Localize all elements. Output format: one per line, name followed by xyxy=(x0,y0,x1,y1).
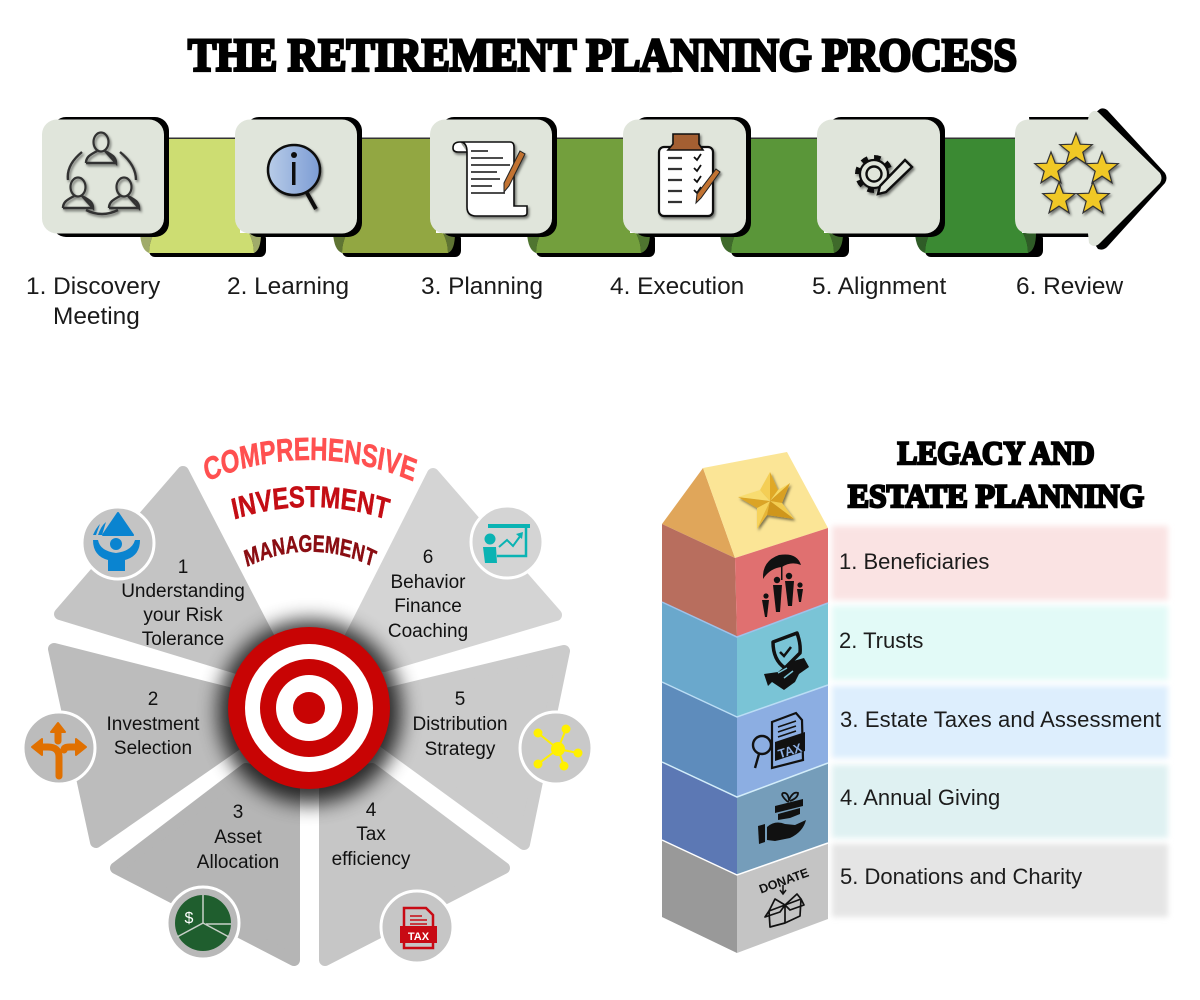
icon: tax document: TAX xyxy=(408,931,430,943)
block 5 xyxy=(662,840,828,953)
segment text 3: Asset xyxy=(214,827,262,848)
roof xyxy=(662,452,828,558)
step labels: 1. Discovery xyxy=(26,273,161,300)
icon: tax search: TAX xyxy=(776,741,804,761)
icon: gift in hand xyxy=(758,793,806,844)
segment 3 xyxy=(116,769,294,960)
icon: clipboard checklist xyxy=(659,134,720,216)
icon: gold star xyxy=(738,472,794,529)
curved heading: COMPREHENSIVE xyxy=(204,438,418,482)
title: THE RETIREMENT PLANNING PROCESS xyxy=(188,30,1017,82)
icon: direction arrows xyxy=(23,712,95,784)
process ribbon: six steps xyxy=(42,108,1166,257)
segment 2 xyxy=(54,649,240,842)
segment 5 xyxy=(384,651,564,844)
step labels: 4. Execution xyxy=(610,273,744,300)
block 2 xyxy=(662,602,828,717)
bullseye target xyxy=(228,627,390,789)
connector ribbon 2 xyxy=(333,138,461,257)
segment 6 xyxy=(349,474,556,666)
segment 4 xyxy=(325,769,504,960)
segment text 2: 2 xyxy=(148,689,158,710)
icon: scroll and pen xyxy=(453,142,527,216)
step box 1 xyxy=(42,117,169,237)
icon: gear and pencil xyxy=(858,158,912,194)
icon: donate box: DONATE xyxy=(757,866,811,896)
segment text 2: Investment xyxy=(107,714,200,735)
step labels: Meeting xyxy=(53,303,140,330)
segment text 2: Selection xyxy=(114,738,192,759)
segment text 3: 3 xyxy=(233,802,243,823)
segment text 5: 5 xyxy=(455,689,465,710)
icon: distribution network xyxy=(520,712,592,784)
bar 5 background xyxy=(832,844,1168,917)
segment text 6: 6 xyxy=(423,547,433,568)
connector ribbon 5 xyxy=(915,138,1043,257)
icon: shield and handshake xyxy=(764,633,809,690)
icon: info magnifier xyxy=(268,145,320,209)
connector ribbon 4 xyxy=(720,138,849,257)
bar 4 background xyxy=(832,765,1168,838)
segment text 4: efficiency xyxy=(332,849,411,870)
bar label 2: 2. Trusts xyxy=(839,628,923,653)
icon: five stars xyxy=(1035,133,1118,213)
label bars xyxy=(832,526,1168,917)
icon: risk umbrella figure xyxy=(82,507,154,579)
segment 1 xyxy=(60,472,270,668)
step box 2 xyxy=(235,117,362,237)
curved heading: MANAGEMENT xyxy=(244,534,378,567)
icon: asset pie xyxy=(167,887,239,959)
step box 4 xyxy=(623,117,751,237)
step labels: 6. Review xyxy=(1016,273,1123,300)
step labels: 3. Planning xyxy=(421,273,543,300)
icon: donate box xyxy=(757,866,811,927)
step labels: 5. Alignment xyxy=(812,273,946,300)
step labels xyxy=(26,273,1123,330)
segment text 6: Coaching xyxy=(388,621,468,642)
segment text 4: 4 xyxy=(366,800,377,821)
block 1 xyxy=(662,524,828,637)
bar label 5: 5. Donations and Charity xyxy=(840,864,1082,889)
bar 3 background xyxy=(832,686,1168,758)
legacy heading xyxy=(848,436,1144,515)
segment text 6: Behavior xyxy=(390,572,466,593)
segment text 1: Understanding xyxy=(121,581,245,602)
target shadow xyxy=(218,620,402,804)
wheel: comprehensive investment management xyxy=(24,438,590,966)
icon: three people in a circle xyxy=(63,132,139,214)
bar label 4: 4. Annual Giving xyxy=(840,785,1000,810)
bar label 1: 1. Beneficiaries xyxy=(839,549,989,574)
segment text 4: Tax xyxy=(356,824,386,845)
stacked house xyxy=(662,452,828,953)
bar label 3: 3. Estate Taxes and Assessment xyxy=(840,707,1161,732)
icon: asset pie: $ xyxy=(185,910,194,927)
segment text 1: 1 xyxy=(178,557,188,578)
step box 6: arrow head xyxy=(1015,108,1166,250)
block 3 xyxy=(662,682,828,797)
bar 2 background xyxy=(832,606,1168,680)
connector ribbon 3 xyxy=(527,138,655,257)
segment text 5: Distribution xyxy=(412,714,508,735)
block 4 xyxy=(662,762,828,875)
icon: umbrella family xyxy=(762,554,803,617)
segment text 1: Tolerance xyxy=(142,629,224,650)
segment text 3: Allocation xyxy=(197,852,279,873)
curved heading: INVESTMENT xyxy=(231,486,391,520)
segment text 6: Finance xyxy=(394,596,462,617)
segment text 1: your Risk xyxy=(143,605,223,626)
legacy heading: LEGACY AND xyxy=(898,436,1094,472)
segment text 5: Strategy xyxy=(425,739,496,760)
icon: presenter with chart xyxy=(471,506,543,578)
icon: tax document xyxy=(381,891,453,963)
icon: tax search xyxy=(753,713,805,768)
step box 3 xyxy=(430,117,557,237)
step labels: 2. Learning xyxy=(227,273,349,300)
legacy heading: ESTATE PLANNING xyxy=(848,479,1144,515)
connector ribbon 1 xyxy=(140,138,266,257)
bar 1 background xyxy=(832,526,1168,600)
curved heading xyxy=(204,438,418,567)
step box 5 xyxy=(817,117,945,237)
